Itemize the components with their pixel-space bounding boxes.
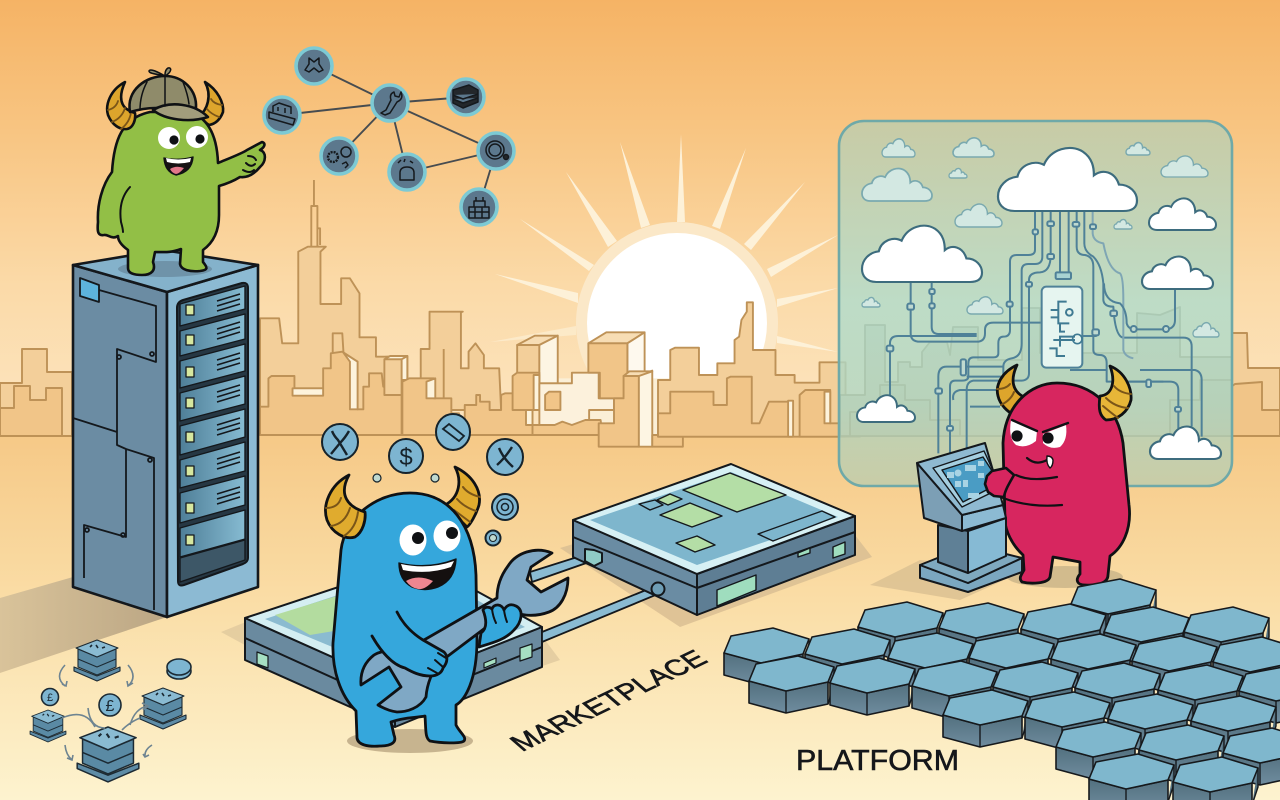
- wrench: [361, 550, 568, 712]
- mouth and tooth: [1027, 456, 1053, 468]
- ground: [0, 436, 1280, 800]
- blue mechanic monster: [326, 467, 568, 753]
- ground shadow: [1007, 566, 1123, 588]
- dollar token: [389, 439, 423, 473]
- vents: [217, 294, 240, 504]
- eyes: [1010, 420, 1066, 448]
- left marketplace tray: [245, 560, 542, 727]
- network of service nodes: [264, 48, 514, 225]
- small dots: [373, 474, 439, 482]
- server top: [73, 250, 258, 292]
- circuit lines: [887, 212, 1202, 453]
- tool token: [487, 439, 523, 475]
- left arm and hand: [372, 612, 447, 676]
- block bottom: [77, 727, 139, 782]
- arm creases: [120, 156, 256, 232]
- screen tiles: [947, 461, 984, 498]
- central chip: [1042, 272, 1082, 368]
- block top: [74, 640, 120, 681]
- arm lines: [1003, 475, 1062, 506]
- ground shadow: [347, 729, 473, 753]
- city skyline: [0, 180, 1280, 447]
- connecting rods: [530, 553, 658, 642]
- server front face: [167, 265, 258, 617]
- eyes: [400, 520, 460, 556]
- economy diagram of blocks: [30, 640, 191, 782]
- console screen: [942, 457, 1000, 502]
- node circles: [264, 48, 514, 225]
- console shadow: [870, 560, 1022, 600]
- side panel lines: [73, 278, 156, 610]
- server side face: [73, 265, 167, 617]
- sockets: [585, 549, 602, 566]
- big marketplace tray shadow: [560, 530, 872, 627]
- server rack: [73, 250, 258, 617]
- flow arrows: [60, 665, 152, 760]
- red operator monster: [997, 365, 1131, 588]
- coins: [42, 659, 191, 716]
- label: platform: PLATFORM: [796, 745, 959, 777]
- coins: £: [47, 692, 53, 704]
- indicator lights: [186, 305, 194, 545]
- body and arms: [98, 112, 265, 275]
- left horn: [326, 475, 365, 538]
- right horn: [1099, 366, 1131, 420]
- hexagon platform: [724, 579, 1280, 800]
- green detective monster: [98, 68, 265, 275]
- left horn: [107, 82, 135, 129]
- sun with rays: [490, 134, 838, 424]
- label: marketplace: MARKETPLACE: [503, 645, 714, 756]
- target token: [492, 494, 518, 520]
- coins: £: [106, 698, 115, 715]
- hand fingers: [492, 609, 507, 623]
- network links: [282, 66, 496, 207]
- panel background: [839, 121, 1232, 486]
- hologram panel: cloud network: [839, 121, 1232, 486]
- floating tool icons: [322, 414, 523, 546]
- marketplace tray shadow: [221, 600, 560, 715]
- wrench token: [322, 424, 358, 460]
- console housing: [917, 463, 962, 531]
- angry brows: [1012, 420, 1068, 432]
- mouth: [164, 157, 193, 175]
- left horn: [997, 365, 1026, 415]
- red monster hand: [985, 468, 1014, 497]
- right hand: [479, 605, 521, 647]
- server shadow: [0, 577, 167, 673]
- fingers: [428, 653, 446, 673]
- body: [333, 493, 477, 746]
- detective hat: [129, 68, 208, 120]
- node glyphs: [269, 58, 508, 218]
- city visible through hologram: [840, 307, 1232, 436]
- mouth: [399, 559, 456, 590]
- tray lights: [717, 542, 845, 606]
- tray screen blocks: [639, 473, 835, 552]
- horizon line: [0, 435, 1280, 437]
- console column: [938, 525, 968, 573]
- top shadow: [118, 261, 212, 277]
- rack bay: [177, 283, 248, 586]
- body: [1003, 383, 1130, 585]
- server units: [180, 286, 245, 582]
- white clouds: [857, 148, 1221, 459]
- sky background: [0, 0, 1280, 440]
- console screen frame: [933, 451, 1001, 507]
- block right: [140, 688, 186, 729]
- tag token: [436, 414, 470, 450]
- big marketplace tray: [573, 464, 855, 615]
- touch console: [917, 443, 1022, 592]
- dollar token: $: [399, 444, 413, 471]
- right horn: [198, 82, 223, 125]
- console base: [920, 558, 1022, 592]
- eyes: [158, 126, 208, 149]
- small ring: [486, 530, 500, 546]
- faint clouds: [862, 138, 1219, 337]
- right horn: [445, 467, 480, 527]
- block left: [30, 710, 66, 742]
